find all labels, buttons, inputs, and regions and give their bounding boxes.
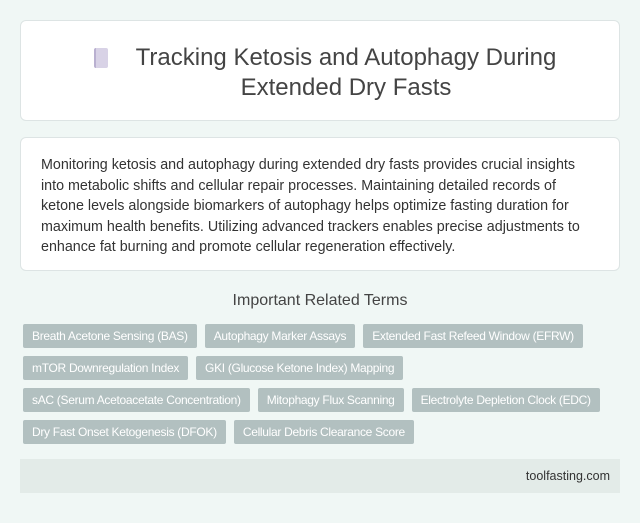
tags: Electrolyte Depletion Clock (EDC) bbox=[421, 393, 591, 407]
title bbox=[136, 44, 556, 101]
description text: into metabolic shifts and cellular repair processes. Maintaining detailed records of bbox=[41, 178, 556, 194]
description text: maximum health benefits. Utilizing advanced trackers enables precise adjustments to bbox=[41, 218, 580, 234]
tags: Dry Fast Onset Ketogenesis (DFOK) bbox=[32, 425, 217, 439]
title: Tracking Ketosis and Autophagy During bbox=[136, 44, 556, 71]
footer: toolfasting.com bbox=[526, 469, 610, 483]
footer bbox=[20, 459, 620, 493]
description text: ketone levels alongside biomarkers of autophagy helps optimize fasting duration for bbox=[41, 198, 569, 214]
tags: mTOR Downregulation Index bbox=[32, 361, 179, 375]
tags: Cellular Debris Clearance Score bbox=[243, 425, 405, 439]
description text: Monitoring ketosis and autophagy during extended dry fasts provides crucial insights bbox=[41, 157, 575, 173]
icon: document bbox=[94, 48, 108, 68]
title: Extended Dry Fasts bbox=[241, 74, 451, 101]
tags bbox=[23, 324, 600, 444]
tags: Mitophagy Flux Scanning bbox=[267, 393, 395, 407]
tags: Extended Fast Refeed Window (EFRW) bbox=[372, 329, 574, 343]
tags: Breath Acetone Sensing (BAS) bbox=[32, 329, 188, 343]
tags: sAC (Serum Acetoacetate Concentration) bbox=[32, 393, 241, 407]
header card bbox=[20, 20, 620, 121]
tags: GKI (Glucose Ketone Index) Mapping bbox=[205, 361, 394, 375]
description text: enhance fat burning and promote cellular regeneration effectively. bbox=[41, 239, 455, 255]
section heading: Important Related Terms bbox=[233, 292, 407, 309]
tags: Autophagy Marker Assays bbox=[214, 329, 346, 343]
description card bbox=[20, 137, 620, 271]
description text bbox=[41, 157, 580, 255]
